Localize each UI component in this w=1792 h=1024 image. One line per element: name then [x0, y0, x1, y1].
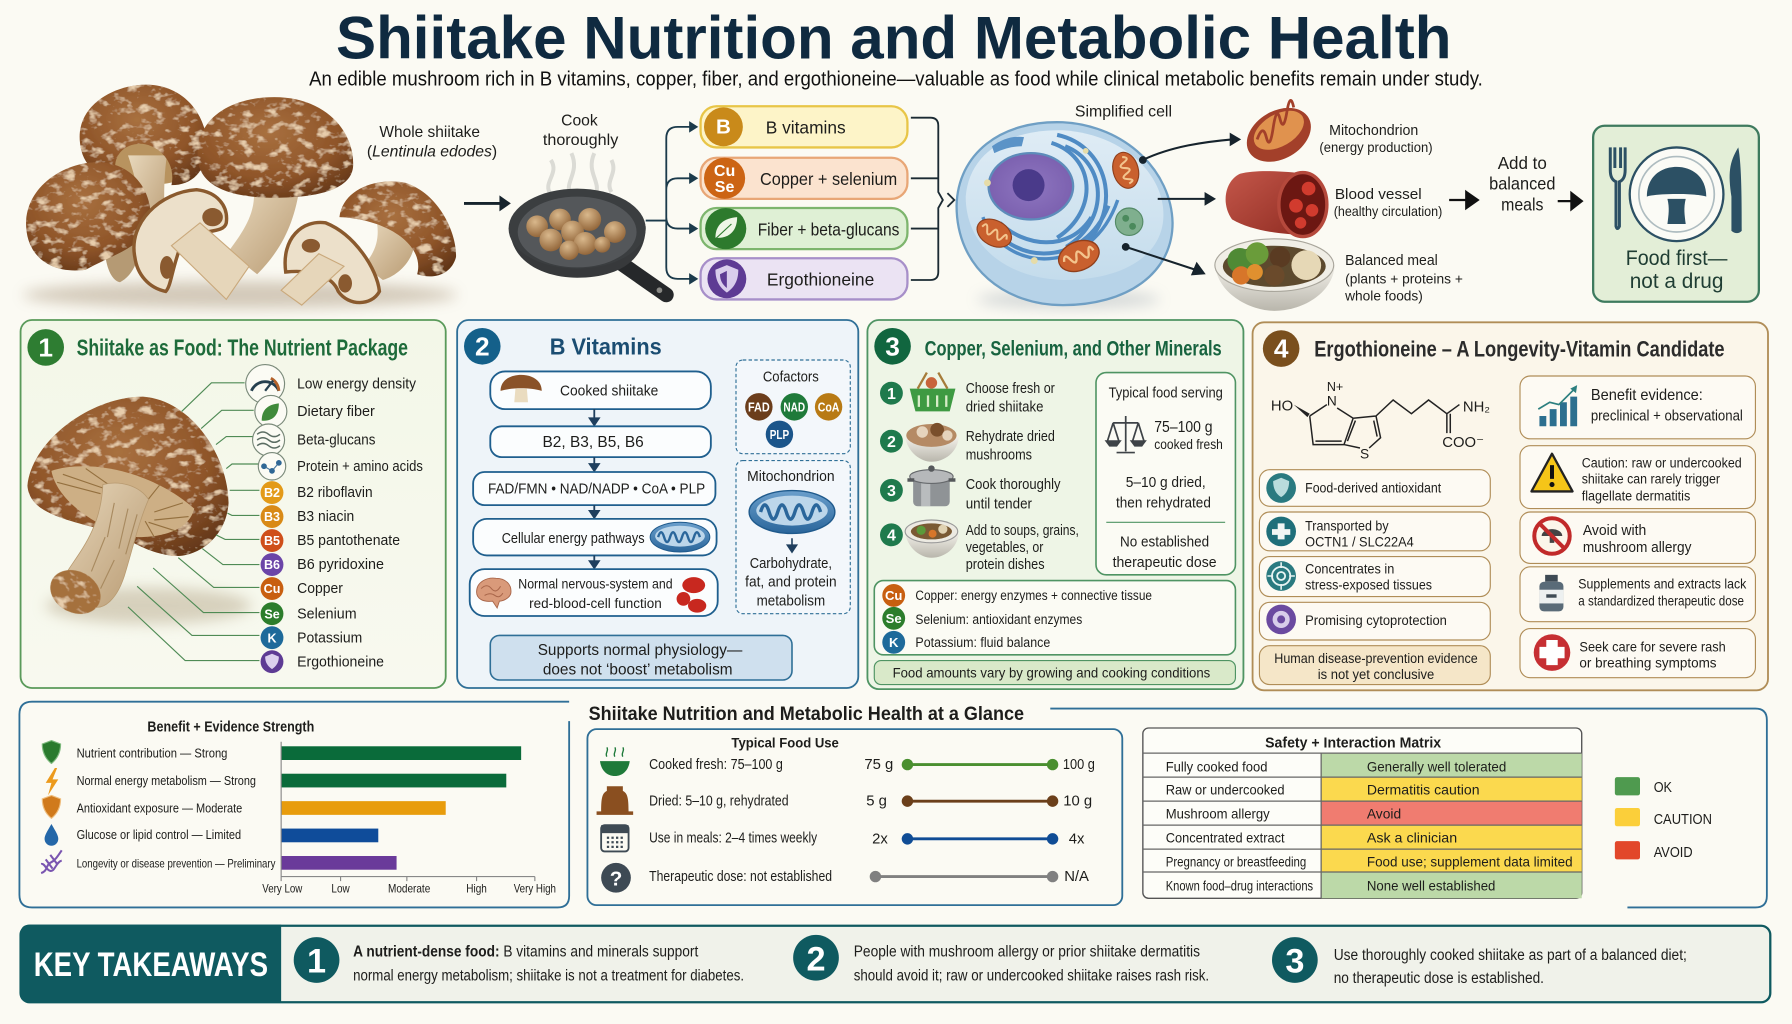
- item: selenium: Se: [264, 607, 280, 621]
- takeaway 1: A nutrient-dense food: B vitamins and minerals support: [353, 944, 699, 961]
- item: seek care: Seek care for severe rash: [1579, 639, 1726, 655]
- pill: fiber + beta-glucans: Fiber + beta-glucans: [758, 219, 900, 239]
- item: protein + amino acids: Protein + amino acids: [297, 459, 423, 475]
- arrow: [590, 505, 599, 518]
- box: typical food serving: [1096, 373, 1235, 575]
- step 3: cook: [880, 465, 1061, 513]
- item: potassium: [261, 626, 362, 649]
- panel: benefit and evidence strength chart: [19, 702, 569, 907]
- item: transported by OCTN1: [1259, 512, 1490, 551]
- takeaway 2: should avoid it; raw or undercooked shiitake raises rash risk.: [854, 968, 1209, 985]
- item: caution: [1520, 446, 1755, 509]
- badge 3: [874, 328, 911, 365]
- box: cofactors: PLP: [770, 428, 789, 442]
- row: longevity or disease prevention: [41, 850, 397, 873]
- row: longevity or disease prevention: Longevity or disease prevention — Preliminary: [77, 856, 275, 870]
- box: typical food serving: then rehydrated: [1116, 495, 1211, 511]
- item: food-derived antioxidant: Food-derived antioxidant: [1305, 481, 1441, 497]
- note: evidence not conclusive: [1259, 646, 1490, 685]
- table header: Safety + Interaction Matrix: [1265, 735, 1442, 751]
- callout: supports normal physiology: does not ‘boost’ metabolism: [543, 661, 733, 678]
- item: avoid with allergy: [1520, 512, 1755, 563]
- box: mineral roles: Cu: [885, 588, 902, 603]
- item: B6 pyridoxine: B6: [264, 558, 280, 572]
- banner label: KEY TAKEAWAYS: [34, 946, 268, 984]
- chart axis: High: [466, 882, 487, 896]
- pill: copper + selenium: Copper + selenium: [760, 169, 897, 189]
- panel 1: shiitake as food: [21, 320, 446, 688]
- item: B2 riboflavin: B2 riboflavin: [297, 485, 373, 501]
- text: add to balanced meals: balanced: [1489, 174, 1555, 194]
- legend: safety colours: CAUTION: [1654, 812, 1712, 828]
- item: B5 pantothenate: [261, 529, 400, 552]
- chart title: Benefit + Evidence Strength: [147, 719, 314, 735]
- item: potassium: K: [267, 631, 277, 645]
- item: B3 niacin: B3: [264, 510, 280, 524]
- heading 1: Shiitake as Food: The Nutrient Package: [77, 334, 408, 360]
- item: dietary fiber: Dietary fiber: [297, 404, 375, 420]
- row: antioxidant exposure: [42, 795, 446, 818]
- item: copper: Cu: [264, 582, 280, 596]
- takeaway 2: 2: [806, 940, 826, 978]
- pill: ergothioneine: Ergothioneine: [767, 270, 874, 290]
- box: mineral roles: Selenium: antioxidant enzymes: [915, 612, 1082, 627]
- banner: key takeaways: [21, 925, 1770, 1002]
- chemical structure: ergothioneine: N: [1327, 394, 1337, 409]
- icon: mitochondrion: [1237, 97, 1321, 173]
- box: cofactors: [736, 360, 850, 454]
- title: Shiitake Nutrition and Metabolic Health: [336, 3, 1451, 71]
- step 4: add to dishes: [880, 520, 1079, 573]
- flow box: cellular energy pathways: [473, 519, 717, 555]
- step 4: add to dishes: Add to soups, grains,: [966, 523, 1079, 539]
- row: normal energy metabolism: Normal energy metabolism — Strong: [77, 774, 256, 788]
- box: typical food serving: No established: [1120, 534, 1209, 550]
- table rows: Avoid: [1367, 806, 1401, 822]
- item: B2 riboflavin: B2: [264, 486, 280, 500]
- row: cooked fresh: [600, 747, 1095, 776]
- heading 3: Copper, Selenium, and Other Minerals: [925, 335, 1222, 360]
- flow box: nervous system and red blood cells: Normal nervous-system and: [518, 577, 673, 593]
- row: therapeutic dose: ?: [610, 868, 622, 891]
- row: nutrient contribution: Nutrient contribution — Strong: [77, 747, 227, 761]
- item: concentrates in tissues: [1259, 557, 1490, 597]
- row: dried: Dried: 5–10 g, rehydrated: [649, 794, 789, 810]
- row: glucose or lipid control: [45, 824, 378, 846]
- row: dried: 10 g: [1063, 794, 1092, 810]
- item: B3 niacin: B3 niacin: [297, 509, 354, 525]
- row: normal energy metabolism: [46, 768, 506, 795]
- bracket: nutrients to cell: [911, 118, 954, 280]
- item: avoid with allergy: mushroom allergy: [1583, 540, 1692, 556]
- item: low energy density: Low energy density: [297, 377, 417, 393]
- takeaway 1: normal energy metabolism; shiitake is not a treatment for diabetes.: [353, 968, 744, 985]
- box: typical food serving: 75–100 g: [1154, 419, 1213, 436]
- illustration: whole and sliced shiitake group: [23, 85, 457, 309]
- box: mineral roles: [874, 581, 1235, 655]
- label: cook thoroughly: Cook: [561, 113, 599, 130]
- leader lines: [128, 383, 259, 661]
- step 3: cook: Cook thoroughly: [966, 477, 1061, 493]
- row: nutrient contribution: [42, 741, 521, 763]
- text: balanced meal label: whole foods): [1344, 289, 1423, 305]
- row: dried: [597, 786, 1092, 815]
- table rows: Dermatitis caution: [1367, 782, 1480, 798]
- box: mineral roles: Se: [886, 611, 902, 626]
- badge 4: [1263, 330, 1299, 367]
- step 4: add to dishes: vegetables, or: [966, 540, 1043, 556]
- icon: beta-glucans: [253, 424, 285, 456]
- text: food first - not a drug: [1626, 245, 1728, 293]
- badge 2: 2: [475, 331, 490, 361]
- box: mineral roles: Potassium: fluid balance: [915, 635, 1051, 650]
- item: copper: Copper: [297, 581, 343, 597]
- step 3: cook: 3: [887, 483, 896, 500]
- pill: B vitamins: B: [716, 116, 731, 139]
- item: B3 niacin: [261, 505, 354, 528]
- box: mitochondrion: fat, and protein: [745, 574, 837, 590]
- subtitle: An edible mushroom rich in B vitamins, copper, fiber, and ergothioneine—valuable as food while clinical metabolic benefits remain under study.: [309, 69, 1483, 91]
- takeaway 1: [294, 937, 744, 985]
- panel 2: B vitamins: [457, 320, 858, 688]
- item: caution: shiitake can rarely trigger: [1582, 471, 1720, 486]
- item: concentrates in tissues: stress-exposed tissues: [1305, 578, 1432, 594]
- box: typical food serving: cooked fresh: [1154, 437, 1223, 452]
- box: cofactors: Cofactors: [763, 370, 819, 386]
- step 1: choose: 1: [887, 386, 896, 403]
- label: simplified cell: Simplified cell: [1075, 104, 1172, 121]
- callout: supports normal physiology: Supports normal physiology—: [538, 642, 742, 659]
- item: benefit evidence: [1520, 376, 1755, 439]
- item: benefit evidence: preclinical + observational: [1591, 409, 1743, 425]
- step 2: rehydrate: 2: [887, 434, 896, 451]
- item: B5 pantothenate: B5: [264, 534, 280, 548]
- item: copper: [261, 577, 343, 600]
- step 1: choose: [880, 373, 1055, 415]
- text: food first - not a drug: not a drug: [1630, 268, 1723, 293]
- takeaway 3: Use thoroughly cooked shiitake as part of a balanced diet;: [1334, 947, 1687, 964]
- box: mineral roles: K: [889, 635, 899, 650]
- box: cofactors: NAD: [783, 400, 805, 414]
- badge 3: 3: [885, 331, 900, 361]
- item: supplements and extracts: Supplements and extracts lack: [1578, 577, 1747, 593]
- box: mitochondrion: Carbohydrate,: [750, 556, 832, 572]
- flow box: nervous system and red blood cells: [470, 569, 718, 616]
- badge 1: [27, 329, 64, 366]
- arrow: to food first: [1558, 193, 1582, 209]
- chart axis: [262, 742, 556, 896]
- item: promising cytoprotection: [1259, 602, 1490, 640]
- item: selenium: [261, 602, 357, 625]
- row: meals per week: 4x: [1069, 831, 1085, 847]
- takeaway 2: [793, 935, 1209, 985]
- table rows: [1166, 759, 1573, 894]
- row: cooked fresh: 75 g: [864, 757, 893, 773]
- step 1: choose: Choose fresh or: [966, 381, 1055, 397]
- item: beta-glucans: Beta-glucans: [297, 433, 375, 449]
- pill: B vitamins: [701, 106, 907, 147]
- item: ergothioneine: [261, 650, 384, 673]
- badge 2: [464, 328, 501, 365]
- text: mitochondrion label: Mitochondrion: [1329, 123, 1418, 139]
- takeaway 2: People with mushroom allergy or prior shiitake dermatitis: [854, 944, 1200, 961]
- pill: fiber + beta-glucans: [701, 208, 907, 249]
- table rows: Concentrated extract: [1166, 830, 1285, 846]
- flow box: cooked shiitake: Cooked shiitake: [560, 383, 658, 399]
- text: add to balanced meals: Add to: [1498, 153, 1547, 173]
- heading 2: B Vitamins: [550, 333, 662, 359]
- step 3: cook: until tender: [966, 497, 1032, 513]
- label: cook thoroughly: [543, 113, 618, 149]
- arrows: cell to mitochondrion, vessel, meal: [1123, 133, 1241, 275]
- row: meals per week: Use in meals: 2–4 times weekly: [649, 830, 818, 846]
- table rows: Known food–drug interactions: [1166, 878, 1313, 894]
- pill: copper + selenium: Cu: [714, 163, 735, 180]
- box: cofactors: CoA: [818, 400, 839, 414]
- box: cofactors: FAD: [748, 400, 770, 414]
- legend: safety colours: AVOID: [1654, 845, 1693, 861]
- item: potassium: Potassium: [297, 630, 362, 646]
- note: food amounts vary: Food amounts vary by growing and cooking conditions: [893, 666, 1210, 682]
- flow box: cofactors list: [473, 472, 715, 505]
- box: mitochondrion: [736, 461, 850, 614]
- flow box: cofactors list: FAD/FMN • NAD/NADP • CoA • PLP: [488, 482, 705, 498]
- pill: copper + selenium: Se: [715, 179, 734, 196]
- panel: food first: [1593, 126, 1759, 302]
- flow box: cooked shiitake: [490, 371, 711, 409]
- chart axis: Low: [331, 882, 350, 896]
- item: ergothioneine: Ergothioneine: [297, 654, 384, 670]
- table rows: None well established: [1367, 878, 1495, 894]
- takeaway 3: no therapeutic dose is established.: [1334, 970, 1544, 987]
- text: balanced meal label: (plants + proteins +: [1345, 271, 1463, 287]
- panel: at a glance frame: [1050, 709, 1767, 907]
- text: add to balanced meals: meals: [1501, 194, 1543, 214]
- panel title: Typical Food Use: [731, 735, 839, 751]
- item: seek care: or breathing symptoms: [1579, 655, 1717, 671]
- callout: supports normal physiology: [490, 635, 792, 680]
- chemical structure: ergothioneine: [1271, 380, 1490, 461]
- row: glucose or lipid control: Glucose or lipid control — Limited: [77, 828, 241, 842]
- item: seek care: [1520, 629, 1755, 678]
- step 4: add to dishes: protein dishes: [966, 557, 1045, 573]
- chemical structure: ergothioneine: HO: [1271, 398, 1293, 414]
- item: benefit evidence: Benefit evidence:: [1591, 387, 1703, 404]
- icon: plate with mushroom, fork and knife: [1610, 147, 1742, 241]
- legend: safety colours: OK: [1654, 780, 1672, 796]
- text: mitochondrion label: [1319, 123, 1433, 156]
- item: supplements and extracts: [1520, 567, 1755, 622]
- panel: typical food use: [587, 729, 1122, 905]
- chart axis: Very High: [514, 882, 556, 896]
- box: typical food serving: therapeutic dose: [1113, 555, 1217, 571]
- illustration: large shiitake: [27, 397, 251, 624]
- item: food-derived antioxidant: [1259, 470, 1490, 506]
- text: add to balanced meals: [1489, 153, 1555, 214]
- step 2: rehydrate: mushrooms: [966, 447, 1032, 463]
- row: therapeutic dose: [601, 863, 1089, 893]
- arrow: [590, 409, 599, 425]
- item: supplements and extracts: a standardized therapeutic dose: [1578, 594, 1744, 610]
- text: blood vessel label: Blood vessel: [1335, 187, 1422, 203]
- item: B2 riboflavin: [261, 481, 373, 504]
- legend: safety colours: [1615, 777, 1712, 861]
- chemical structure: ergothioneine: NH₂: [1463, 399, 1490, 415]
- text: food first - not a drug: Food first—: [1626, 245, 1728, 270]
- step 1: choose: dried shiitake: [966, 399, 1043, 415]
- flow box: cellular energy pathways: Cellular energy pathways: [502, 531, 645, 547]
- row: cooked fresh: Cooked fresh: 75–100 g: [649, 757, 783, 773]
- badge 4: 4: [1274, 334, 1289, 364]
- table rows: Pregnancy or breastfeeding: [1166, 854, 1306, 870]
- chart axis: Very Low: [262, 882, 303, 896]
- chemical structure: ergothioneine: COO⁻: [1442, 435, 1484, 451]
- box: mitochondrion: Mitochondrion: [747, 469, 835, 485]
- text: blood vessel label: [1334, 187, 1442, 220]
- item: B6 pyridoxine: [261, 553, 384, 576]
- item: transported by OCTN1: Transported by: [1305, 518, 1389, 534]
- chart axis: Moderate: [388, 882, 431, 896]
- text: blood vessel label: (healthy circulation): [1334, 204, 1442, 220]
- icon: balance scale: [1106, 416, 1145, 453]
- takeaway 1: 1: [307, 943, 326, 981]
- row: meals per week: 2x: [872, 831, 888, 847]
- item: promising cytoprotection: Promising cytoprotection: [1305, 613, 1447, 629]
- box: mineral roles: Copper: energy enzymes + connective tissue: [915, 588, 1152, 603]
- step 2: rehydrate: [880, 423, 1055, 463]
- box: typical food serving: Typical food serving: [1109, 386, 1223, 402]
- item: selenium: Selenium: [297, 606, 357, 622]
- item: concentrates in tissues: Concentrates in: [1305, 562, 1394, 578]
- icon: fiber leaf: [255, 395, 287, 427]
- item: B5 pantothenate: B5 pantothenate: [297, 533, 400, 549]
- panel 3: copper, selenium, minerals: [867, 320, 1243, 689]
- item: B6 pyridoxine: B6 pyridoxine: [297, 557, 384, 573]
- item: transported by OCTN1: OCTN1 / SLC22A4: [1305, 534, 1414, 550]
- label: whole shiitake: (Lentinula edodes): [367, 144, 497, 161]
- table rows: Generally well tolerated: [1367, 759, 1506, 775]
- text: mitochondrion label: (energy production): [1319, 140, 1433, 156]
- chemical structure: ergothioneine: S: [1360, 446, 1369, 461]
- illustration: simplified cell: [957, 122, 1173, 309]
- chemical structure: ergothioneine: N+: [1327, 380, 1343, 394]
- label: whole shiitake: Whole shiitake: [379, 124, 480, 141]
- row: cooked fresh: 100 g: [1063, 757, 1095, 773]
- badge 1: 1: [38, 333, 53, 363]
- takeaway 3: [1272, 937, 1687, 987]
- icon: blood vessel: [1226, 171, 1327, 237]
- pill: ergothioneine: [701, 258, 907, 299]
- arrow: shiitake to pan: [464, 195, 511, 211]
- text: balanced meal label: Balanced meal: [1345, 253, 1438, 269]
- flow box: B2 B3 B5 B6: B2, B3, B5, B6: [543, 434, 644, 451]
- table: safety and interaction matrix: [1143, 728, 1582, 898]
- pill: B vitamins: B vitamins: [766, 118, 846, 138]
- label: cook thoroughly: thoroughly: [543, 132, 618, 149]
- item: caution: flagellate dermatitis: [1582, 489, 1690, 504]
- table rows: Ask a clinician: [1367, 830, 1457, 846]
- icon: protein molecule: [258, 453, 286, 480]
- table rows: Raw or undercooked: [1166, 782, 1285, 798]
- text: balanced meal label: [1344, 253, 1463, 305]
- label: whole shiitake: [367, 124, 497, 161]
- arrow: to balanced meals: [1449, 192, 1478, 208]
- row: dried: 5 g: [866, 794, 887, 810]
- icon: energy gauge: [246, 365, 285, 403]
- banner label: [21, 925, 281, 1002]
- flow box: nervous system and red blood cells: red-blood-cell function: [529, 596, 662, 612]
- row: meals per week: [601, 825, 1085, 851]
- box: mitochondrion: metabolism: [757, 594, 825, 610]
- row: antioxidant exposure: Antioxidant exposure — Moderate: [77, 802, 242, 816]
- table rows: Fully cooked food: [1166, 759, 1267, 775]
- table rows: Food use; supplement data limited: [1367, 854, 1573, 870]
- item: avoid with allergy: Avoid with: [1583, 523, 1646, 539]
- note: evidence not conclusive: Human disease-prevention evidence: [1274, 651, 1478, 667]
- note: evidence not conclusive: is not yet conclusive: [1318, 667, 1434, 683]
- takeaway 3: 3: [1285, 943, 1304, 981]
- panel 4: ergothioneine: [1253, 322, 1768, 690]
- row: therapeutic dose: N/A: [1064, 869, 1089, 885]
- arrow: [590, 457, 599, 471]
- icon: steaming pan: [509, 153, 666, 295]
- note: food amounts vary: [874, 661, 1235, 685]
- icon: balanced meal bowl: [1215, 239, 1335, 311]
- arrow: [590, 555, 599, 568]
- pill: copper + selenium: [701, 158, 907, 199]
- row: therapeutic dose: Therapeutic dose: not established: [649, 869, 832, 885]
- table rows: Mushroom allergy: [1166, 806, 1271, 822]
- box: typical food serving: 5–10 g dried,: [1126, 475, 1206, 491]
- step 2: rehydrate: Rehydrate dried: [966, 429, 1055, 445]
- arrows: pan to nutrients: [666, 121, 698, 285]
- flow box: B2 B3 B5 B6: [490, 426, 711, 457]
- item: caution: Caution: raw or undercooked: [1582, 455, 1742, 470]
- heading: at a glance: Shiitake Nutrition and Metabolic Health at a Glance: [589, 703, 1024, 725]
- step 4: add to dishes: 4: [887, 528, 896, 545]
